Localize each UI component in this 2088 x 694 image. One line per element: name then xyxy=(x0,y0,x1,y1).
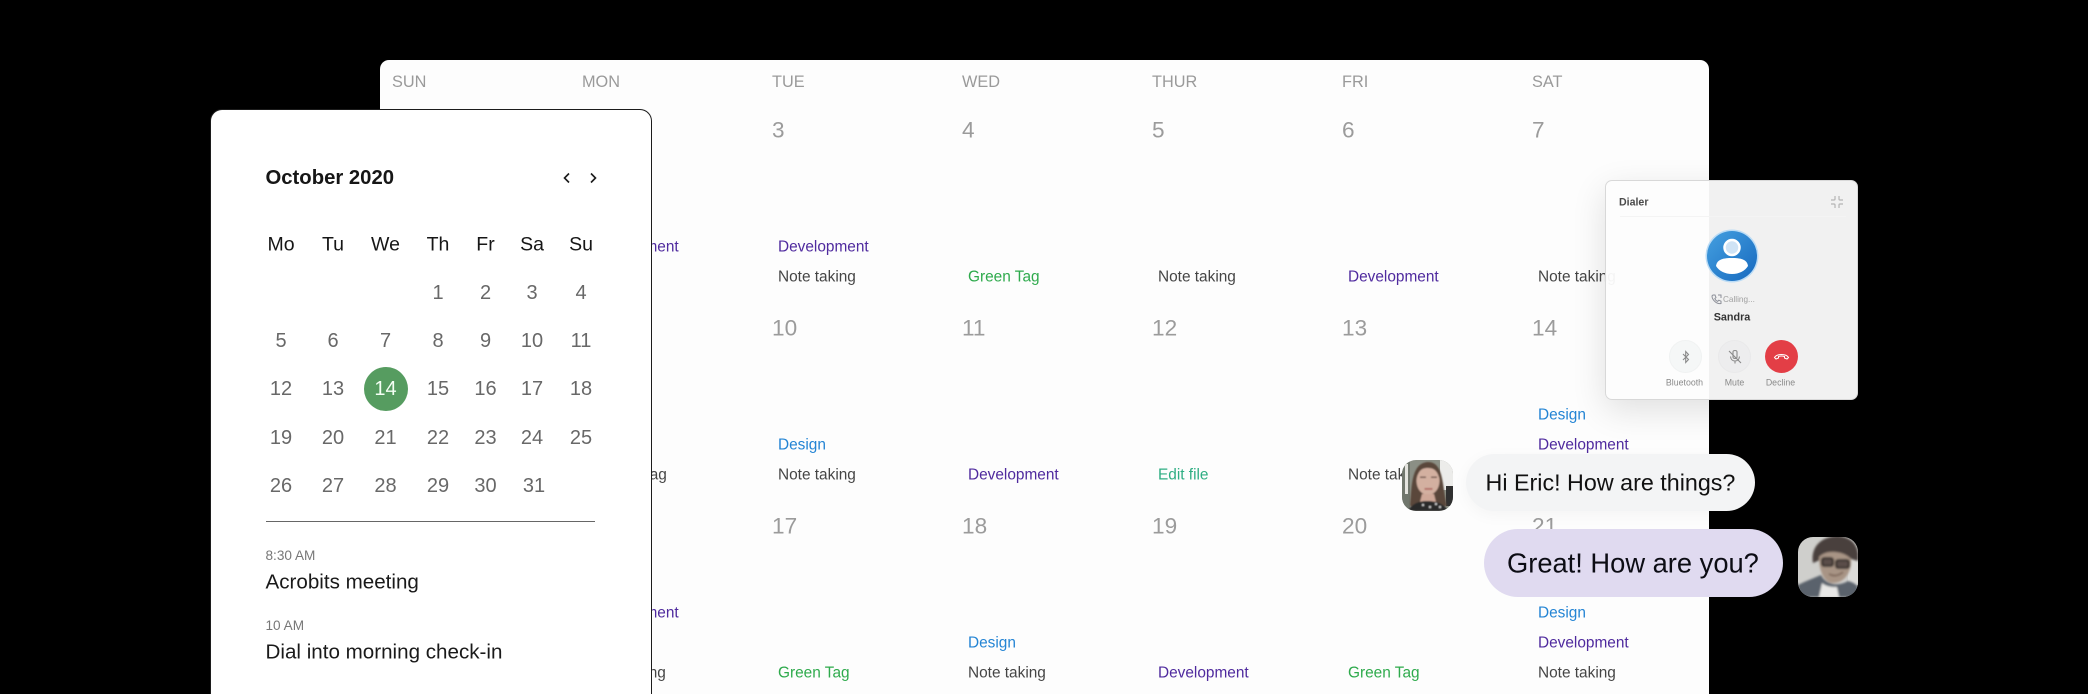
date: 10: 10 xyxy=(772,316,797,341)
date: 20: 20 xyxy=(1342,514,1367,539)
icon: contact avatar xyxy=(1706,230,1758,282)
weekday: Sa: Sa xyxy=(520,233,544,255)
heading: month title: October 2020 xyxy=(266,166,394,188)
day: 31: 31 xyxy=(523,474,545,496)
day: 3: 3 xyxy=(526,282,538,304)
weekday: Tu: Tu xyxy=(322,233,344,255)
day: 22: 22 xyxy=(427,426,449,448)
tag: Development, Wednesday week 2: Development xyxy=(968,466,1059,483)
weekday: Mo: Mo xyxy=(267,233,295,255)
weekday: Su: Su xyxy=(569,233,593,255)
day: 2: 2 xyxy=(480,282,491,304)
day: 13: 13 xyxy=(322,378,344,400)
tag: Note taking, Wednesday week 3: Note taking xyxy=(968,664,1046,681)
tag: Note taking, Monday week 3: Note taking xyxy=(588,664,666,681)
tag: Edit file, Thursday week 2: Edit file xyxy=(1158,466,1208,483)
day: 21: 21 xyxy=(374,426,397,448)
day: 4: 4 xyxy=(575,282,587,304)
tag: Development, Saturday week 2: Development xyxy=(1538,436,1629,453)
chat bubble: incoming message xyxy=(1466,454,1755,511)
tag: Green Tag, Friday week 3: Green Tag xyxy=(1348,664,1420,681)
agenda time: 8:30 AM: 8:30 AM xyxy=(266,548,315,563)
avatar: woman xyxy=(1402,460,1453,511)
tag: Note taking, Tuesday week 2: Note taking xyxy=(778,466,856,483)
weekday header: THUR: THUR xyxy=(1152,73,1197,91)
tag: Design, Saturday week 3: Design xyxy=(1538,604,1586,621)
date: 21: 21 xyxy=(1532,514,1557,539)
icon: calling phone xyxy=(1712,294,1722,304)
day: 5: 5 xyxy=(275,330,287,352)
contact name: Sandra xyxy=(1714,312,1750,324)
day: 30: 30 xyxy=(474,474,497,496)
tag: Design, Tuesday week 2: Design xyxy=(778,436,826,453)
heading: Dialer: Dialer xyxy=(1619,197,1648,209)
icon: bluetooth xyxy=(1682,350,1690,364)
day: 20: 20 xyxy=(322,426,344,448)
date: 6: 6 xyxy=(1342,118,1355,143)
tag: Note taking, Saturday week 1: Note taking xyxy=(1538,268,1616,285)
agenda item: Acrobits meeting: Acrobits meeting xyxy=(266,570,419,593)
day: 17: 17 xyxy=(521,378,543,400)
icon: next month arrow xyxy=(590,172,596,184)
avatar: man xyxy=(1798,537,1858,597)
day: 9: 9 xyxy=(480,330,491,352)
day: 25: 25 xyxy=(570,426,592,448)
tag: Note taking, Saturday week 3: Note taking xyxy=(1538,664,1616,681)
icon: collapse window xyxy=(1831,196,1843,208)
date: 4: 4 xyxy=(962,118,975,143)
weekday header: MON: MON xyxy=(582,73,620,91)
icon: muted microphone xyxy=(1728,350,1742,364)
day: 26: 26 xyxy=(270,474,292,496)
tag: Development, Tuesday week 1: Development xyxy=(778,238,869,255)
tag: Green Tag, Tuesday week 3: Green Tag xyxy=(778,664,850,681)
day: 24: 24 xyxy=(521,426,543,448)
weekday header: WED: WED xyxy=(962,73,1000,91)
selected day: 14 xyxy=(364,366,408,410)
date: 3: 3 xyxy=(772,118,785,143)
icon: hang up handset xyxy=(1774,354,1790,360)
day: 29: 29 xyxy=(427,474,449,496)
day: 23: 23 xyxy=(474,426,497,448)
weekday header: TUE: TUE xyxy=(772,73,805,91)
weekday: Fr: Fr xyxy=(476,233,495,255)
date: 5: 5 xyxy=(1152,118,1165,143)
tag: Development, Monday week 1: Development xyxy=(588,238,679,255)
tag: Note taking, Thursday week 1: Note taking xyxy=(1158,268,1236,285)
date: 17: 17 xyxy=(772,514,797,539)
tag: Green Tag, Wednesday week 1: Green Tag xyxy=(968,268,1040,285)
day: 10: 10 xyxy=(521,330,543,352)
day: 16: 16 xyxy=(474,378,497,400)
tag: Design, Saturday week 2: Design xyxy=(1538,406,1586,423)
button: Decline xyxy=(1764,340,1798,373)
weekday header: FRI: FRI xyxy=(1342,73,1368,91)
tag: Development, Thursday week 3: Development xyxy=(1158,664,1249,681)
day: 6: 6 xyxy=(327,330,339,352)
date: 14: 14 xyxy=(1532,316,1557,341)
panel: dialer popup xyxy=(1605,180,1858,400)
day: 11: 11 xyxy=(571,330,591,352)
weekday header: SAT: SAT xyxy=(1532,73,1562,91)
day: 12: 12 xyxy=(270,378,292,400)
day: 7: 7 xyxy=(380,330,391,352)
day: 27: 27 xyxy=(322,474,344,496)
agenda item: Dial into morning check-in: Dial into morning check-in xyxy=(266,640,502,663)
label: Mute: Mute xyxy=(1725,377,1744,387)
chat bubble: outgoing message xyxy=(1484,529,1783,597)
label: Decline: Decline xyxy=(1766,377,1795,387)
button: Mute xyxy=(1718,340,1751,373)
day: 28: 28 xyxy=(374,474,397,496)
day: 8: 8 xyxy=(432,330,444,352)
date: 13: 13 xyxy=(1342,316,1367,341)
date: 12: 12 xyxy=(1152,316,1177,341)
tag: Note taking, Friday week 2: Note taking xyxy=(1348,466,1426,483)
day: 1: 1 xyxy=(432,282,444,304)
tag: Development, Friday week 1: Development xyxy=(1348,268,1439,285)
panel: monthly calendar grid xyxy=(380,60,1709,694)
day: 18: 18 xyxy=(570,378,592,400)
day: 15: 15 xyxy=(427,378,449,400)
button: Bluetooth xyxy=(1669,340,1702,373)
weekday: We: We xyxy=(371,233,400,255)
date: 7: 7 xyxy=(1532,118,1545,143)
tag: Development, Monday week 3: Development xyxy=(588,604,679,621)
label: Bluetooth: Bluetooth xyxy=(1666,377,1703,387)
message text: Hi Eric! How are things? xyxy=(1486,469,1735,495)
panel: date picker and agenda xyxy=(210,109,652,694)
day: 19: 19 xyxy=(270,426,292,448)
date: 18: 18 xyxy=(962,514,987,539)
agenda time: 10 AM: 10 AM xyxy=(266,618,304,633)
tag: clipped tag, Monday week 2: Tag xyxy=(642,466,667,483)
tag: Development, Saturday week 3: Development xyxy=(1538,634,1629,651)
tag: Design, Wednesday week 3: Design xyxy=(968,634,1016,651)
date: 11: 11 xyxy=(962,316,985,341)
selected day: 14: 14 xyxy=(374,378,397,400)
weekday header: SUN: SUN xyxy=(392,73,426,91)
message text: Great! How are you? xyxy=(1507,547,1759,578)
tag: Note taking, Tuesday week 1: Note taking xyxy=(778,268,856,285)
icon: previous month arrow xyxy=(564,172,570,184)
date: 19: 19 xyxy=(1152,514,1177,539)
call status: Calling... xyxy=(1723,295,1755,304)
weekday: Th: Th xyxy=(427,233,449,255)
